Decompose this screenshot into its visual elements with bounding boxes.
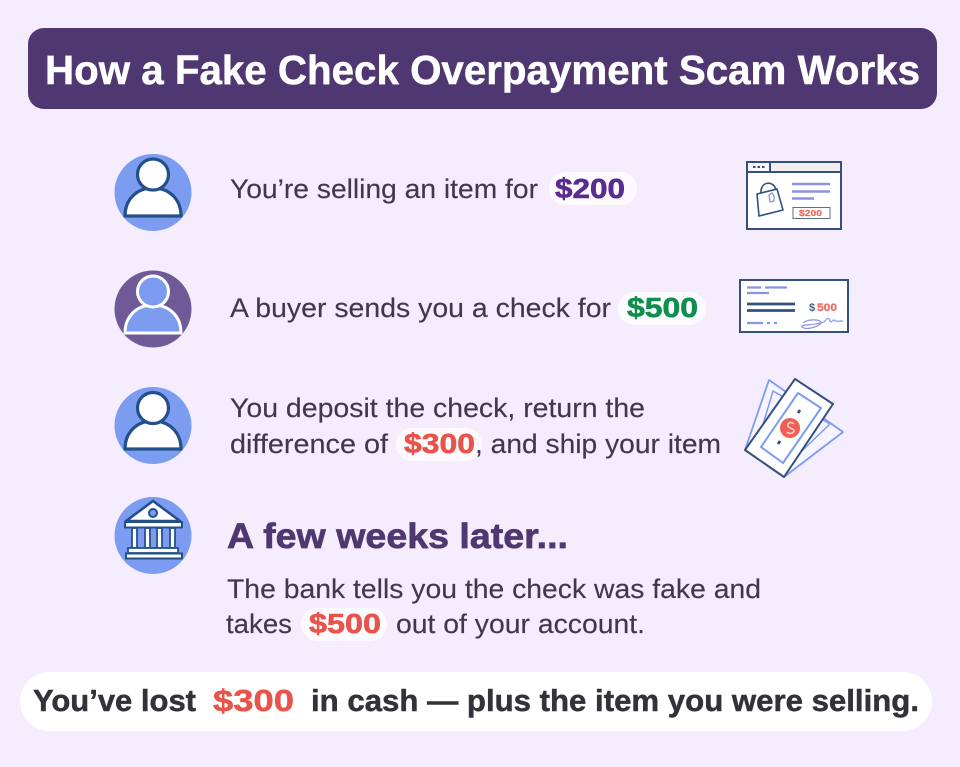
step 3 text: You deposit the check, return the [230, 393, 645, 423]
step 4 text: The bank tells you the check was fake and [227, 574, 761, 604]
icon: banknotes [745, 379, 843, 477]
icon: web listing with bag [747, 162, 841, 229]
step 4 text: takes [226, 609, 292, 639]
icon: seller person [114, 154, 192, 231]
bottom callout [20, 672, 932, 731]
step 2 text [230, 292, 706, 325]
bottom callout: $300 [213, 683, 294, 718]
icon: bank [114, 497, 192, 574]
icon: check: 500 [817, 302, 837, 314]
step 3 text [230, 393, 721, 461]
step 3 text: difference of [230, 429, 389, 459]
icon: customer person [114, 387, 192, 464]
icon: check [740, 280, 848, 332]
icon: check: $ [809, 302, 815, 314]
step 4 text: out of your account. [396, 609, 645, 639]
step 3 text: , and ship your item [475, 429, 721, 459]
step 1 text: $200 [555, 173, 625, 204]
icon: buyer person [114, 270, 192, 348]
step 1 text: You’re selling an item for [230, 174, 538, 204]
heading: a few weeks later: A few weeks later... [227, 517, 568, 556]
title banner: How a Fake Check Overpayment Scam Works [45, 47, 920, 93]
bottom callout: in cash — plus the item you were selling. [311, 683, 919, 718]
step 4 text [226, 574, 761, 641]
icon: web listing with bag: $200 [799, 208, 822, 218]
step 1 text [230, 172, 637, 205]
step 4 text: $500 [309, 608, 381, 639]
step 2 text: $500 [627, 292, 698, 323]
title banner [28, 28, 937, 109]
step 3 text: $300 [404, 428, 475, 459]
step 2 text: A buyer sends you a check for [230, 293, 611, 323]
bottom callout: You’ve lost [33, 683, 196, 718]
